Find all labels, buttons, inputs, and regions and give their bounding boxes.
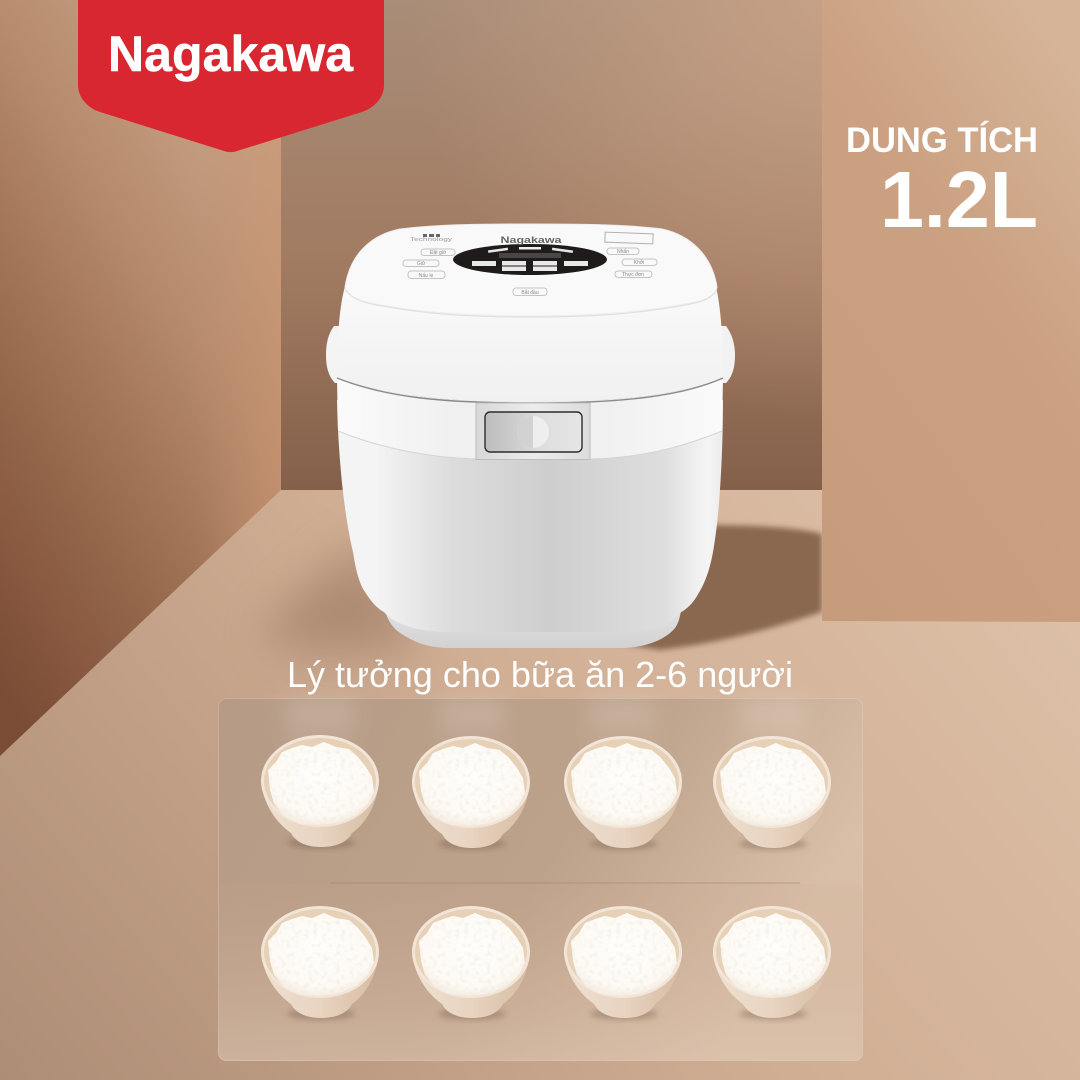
rice cooker [326,224,735,648]
bowl row 1 column 2 [412,736,530,850]
right wall [822,0,1080,622]
bowl row 1 column 4 [713,736,831,850]
lid buttons [403,232,657,296]
lid top plate: Bắt đầu [521,289,539,296]
back wall [281,0,822,490]
bowl row 1 column 1 [261,735,379,849]
bowl row 2 column 3 [564,906,682,1020]
lid brand name: Nagakawa [500,235,563,245]
handles [326,326,735,383]
middle band [337,378,723,459]
lid top plate [345,224,717,317]
lid top plate: Nhấn [617,249,629,255]
capacity value: 1.2L [880,155,1038,244]
lid body [337,283,723,402]
left wall [0,0,281,756]
lid top plate: Nấu lẹ [419,273,433,279]
bowl row 1 column 3 [564,736,682,850]
floor shadow of cooker [262,525,822,653]
lid top plate: Thực đơn [622,272,644,278]
capacity label: DUNG TÍCH [846,120,1038,160]
base [385,610,681,648]
bowl row 2 column 1 [261,906,379,1020]
lid logo: Technology [410,237,453,243]
brand name: Nagakawa [108,26,354,82]
control panel display [453,244,607,275]
bowl row 2 column 4 [713,906,831,1020]
lid top plate: Đặt giờ [430,250,447,256]
lid top plate: Giữ [417,261,426,267]
lid top plate: Khởi [634,259,644,266]
lid logo [410,234,453,243]
latch [476,403,590,460]
capacity callout [846,120,1038,244]
panel: rice bowls [218,698,863,1061]
lower body [337,400,723,632]
brand ribbon [78,0,384,152]
bowl row 2 column 2 [412,906,530,1020]
serving caption: Lý tưởng cho bữa ăn 2-6 người [287,654,793,695]
